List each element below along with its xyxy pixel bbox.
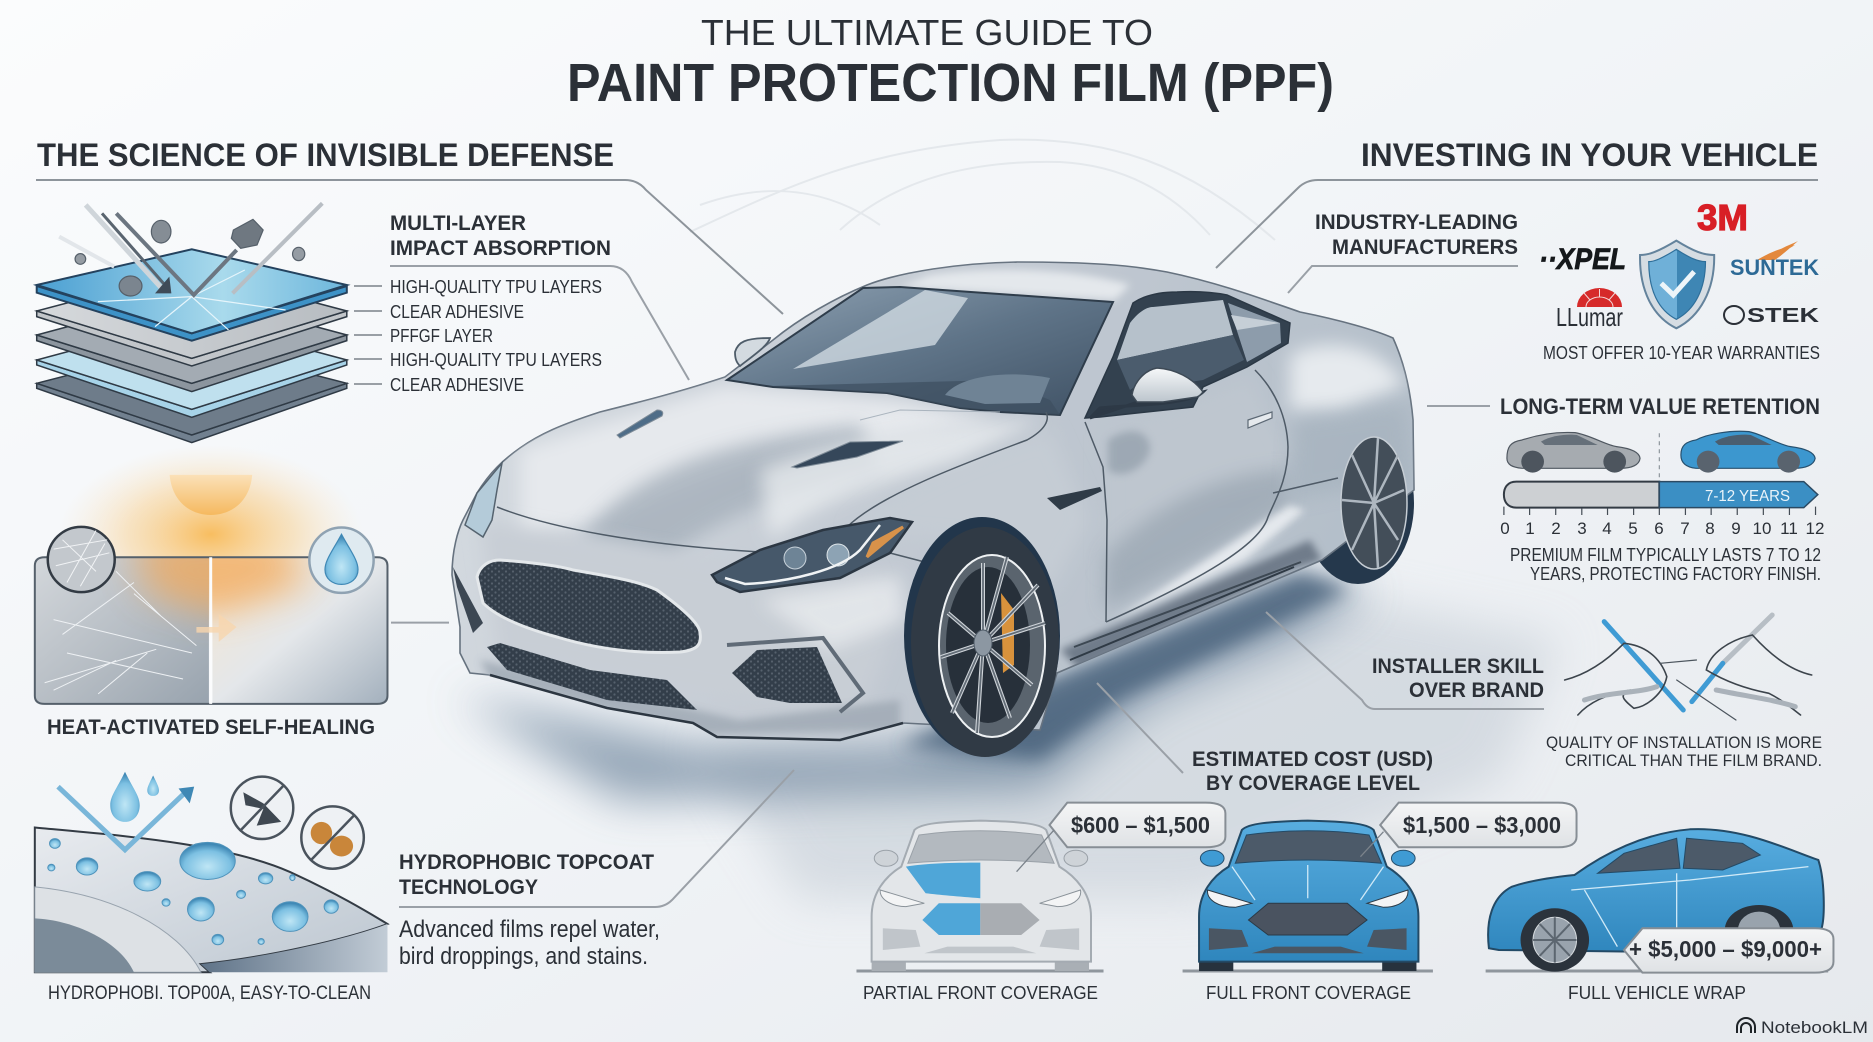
- hydrophobic text block: [399, 851, 660, 970]
- impact arrows: [59, 203, 322, 295]
- car body: [452, 262, 1414, 740]
- timeline numbers: 0: [1500, 519, 1510, 538]
- progress bar: elapsed: [1504, 482, 1659, 508]
- sun glow: [59, 445, 362, 623]
- lower panel: [201, 924, 387, 972]
- transition arrow: [196, 614, 237, 642]
- timeline numbers: 11: [1780, 519, 1798, 538]
- left section heading: [36, 137, 783, 314]
- timeline numbers: 3: [1577, 519, 1587, 538]
- rear wheel: [1341, 437, 1407, 569]
- coverage labels: FULL VEHICLE WRAP: [1568, 983, 1746, 1003]
- car: partial front coverage: [872, 821, 1091, 971]
- manufacturers heading: [1315, 211, 1518, 259]
- timeline numbers: 12: [1806, 519, 1824, 538]
- hydrophobic heading: HYDROPHOBIC TOPCOAT: [399, 851, 654, 874]
- hydrophobic description: Advanced films repel water,: [399, 916, 660, 943]
- value retention note: [1510, 545, 1821, 584]
- timeline numbers: 8: [1705, 519, 1715, 538]
- installer note: [1546, 733, 1822, 770]
- seat silhouette: [945, 374, 1050, 404]
- left headlight: [465, 463, 502, 537]
- sun: [170, 475, 252, 515]
- right mirror: [1090, 392, 1203, 418]
- multi-layer heading: MULTI-LAYER: [390, 212, 526, 235]
- timeline numbers: 7: [1680, 519, 1690, 538]
- left corner vent: [453, 567, 483, 633]
- main car illustration: [452, 262, 1414, 757]
- logo: STEK: [1724, 305, 1820, 327]
- fourth layer: [37, 318, 347, 417]
- crack lines: [98, 270, 286, 330]
- front wheel: [911, 527, 1059, 757]
- price tags text: $1,500 – $3,000: [1403, 812, 1561, 838]
- scratches: [45, 571, 196, 694]
- painted surface: [35, 827, 387, 972]
- price tags text: $600 – $1,500: [1071, 812, 1210, 838]
- wheel arch: [35, 887, 201, 972]
- side window glass: [1117, 300, 1233, 360]
- logo: LLumar: LLumar: [1556, 302, 1623, 332]
- layer label text: HIGH-QUALITY TPU LAYERS: [390, 350, 602, 370]
- logo: LLumar: [1556, 288, 1623, 332]
- cost heading: [1192, 748, 1433, 795]
- coverage cars: [856, 803, 1833, 973]
- heat overlay: [134, 534, 304, 616]
- main car shadow: [455, 572, 1560, 900]
- right headlight: [712, 518, 912, 592]
- third layer: [37, 293, 347, 392]
- value retention heading: LONG-TERM VALUE RETENTION: [1500, 394, 1820, 419]
- layer labels: HIGH-QUALITY TPU LAYERS: [390, 277, 602, 297]
- icon: no bird droppings: [231, 777, 293, 839]
- timeline numbers: 9: [1731, 519, 1741, 538]
- leader lines to car: [390, 266, 1544, 907]
- protected blue car: [1681, 431, 1815, 473]
- icon: installer hands: [1565, 615, 1812, 720]
- water drop magnifier: [309, 528, 374, 593]
- deflection arrow: [58, 787, 187, 850]
- manufacturers heading: MANUFACTURERS: [1332, 236, 1518, 259]
- scratched half: [35, 557, 209, 704]
- ticks: [1504, 507, 1816, 515]
- timeline numbers: 10: [1753, 519, 1771, 538]
- left section heading: THE SCIENCE OF INVISIBLE DEFENSE: [37, 137, 614, 173]
- cost heading: BY COVERAGE LEVEL: [1206, 772, 1420, 795]
- timeline numbers: 1: [1525, 519, 1535, 538]
- installer note: QUALITY OF INSTALLATION IS MORE: [1546, 733, 1822, 752]
- second layer: [37, 270, 347, 366]
- logo: SUNTEK: SUNTEK: [1730, 255, 1819, 280]
- title line 1: THE ULTIMATE GUIDE TO: [701, 12, 1153, 53]
- rear tyre: [1302, 422, 1414, 584]
- price tags text: [1071, 812, 1822, 962]
- hydrophobic text block: bird droppings, and stains.: [399, 943, 648, 970]
- windshield reflection: [793, 290, 968, 369]
- installer note: CRITICAL THAN THE FILM BRAND.: [1565, 751, 1822, 770]
- logo: XPEL: ··XPEL: [1539, 243, 1626, 276]
- windshield dash: [770, 380, 1060, 415]
- left mirror: [735, 338, 770, 366]
- coverage labels: [863, 983, 1746, 1003]
- car: full vehicle wrap: [1488, 829, 1824, 972]
- manufacturers heading: INDUSTRY-LEADING: [1315, 211, 1518, 234]
- healed half: [212, 557, 387, 704]
- logo: STEK: STEK: [1747, 305, 1820, 327]
- value retention illustration: [1504, 431, 1818, 515]
- layer callout ticks: [354, 286, 382, 384]
- timeline numbers: 6: [1654, 519, 1664, 538]
- layer label text: IMPACT ABSORPTION: [390, 237, 611, 260]
- lower grille: [487, 643, 697, 710]
- hydrophobic text block: TECHNOLOGY: [399, 876, 538, 899]
- body shading: [480, 270, 1413, 735]
- icon: no stains: [301, 806, 364, 869]
- timeline numbers: 2: [1551, 519, 1561, 538]
- door handles: [1047, 487, 1102, 510]
- coverage labels: FULL FRONT COVERAGE: [1206, 983, 1411, 1003]
- value retention note: YEARS, PROTECTING FACTORY FINISH.: [1530, 564, 1821, 584]
- hood vents: [792, 441, 903, 468]
- right section heading: [1216, 137, 1818, 268]
- progress bar: protected: [1659, 482, 1818, 508]
- price tag leaders: [1017, 830, 1384, 872]
- side window frame: [1085, 292, 1290, 418]
- timeline numbers: 4: [1602, 519, 1612, 538]
- panel lines: [490, 370, 1338, 740]
- title: [567, 12, 1334, 113]
- cost heading: ESTIMATED COST (USD): [1192, 748, 1433, 771]
- timeline divider: [1658, 433, 1660, 478]
- bottom layer: [37, 343, 347, 443]
- side window lower glass: [1117, 335, 1244, 390]
- side air intake: [732, 647, 842, 703]
- layer label text: [354, 212, 611, 395]
- price tag shapes: [1049, 803, 1833, 973]
- ghost car outline: [690, 140, 1275, 240]
- panel: heat-activated self-healing: [35, 445, 387, 704]
- NotebookLM badge: NotebookLM: [1761, 1018, 1868, 1037]
- rocks: [75, 219, 305, 296]
- water beads: [48, 839, 338, 945]
- value retention note: PREMIUM FILM TYPICALLY LASTS 7 TO 12: [1510, 545, 1821, 565]
- ground lines: [856, 969, 1828, 972]
- hydrophobic caption: HYDROPHOBI. TOP00A, EASY-TO-CLEAN: [48, 983, 371, 1004]
- panel border: [35, 557, 387, 704]
- coverage labels: PARTIAL FRONT COVERAGE: [863, 983, 1098, 1003]
- layer label text: PFFGF LAYER: [390, 326, 493, 346]
- installer heading: OVER BRAND: [1409, 679, 1544, 702]
- falling drops: [110, 772, 140, 822]
- car: full front coverage: [1199, 821, 1418, 971]
- icon: warranty shield: [1640, 241, 1714, 328]
- installer heading: [1372, 655, 1544, 702]
- scratch magnifier: [48, 527, 115, 592]
- price tags text: + $5,000 – $9,000+: [1629, 936, 1822, 962]
- top layer: [37, 249, 347, 341]
- bar label: 7-12 YEARS: [1705, 488, 1790, 505]
- quarter window: [1228, 303, 1281, 362]
- windshield: [727, 287, 1113, 415]
- layer label text: CLEAR ADHESIVE: [390, 375, 524, 395]
- timeline numbers: [1500, 519, 1824, 538]
- panel: hydrophobic topcoat: [35, 772, 387, 972]
- panel: multi-layer film stack: [37, 203, 347, 443]
- front wheel arch: [904, 517, 1060, 755]
- timeline numbers: 5: [1628, 519, 1638, 538]
- self-healing caption: HEAT-ACTIVATED SELF-HEALING: [47, 716, 375, 739]
- front grille: [477, 560, 700, 652]
- installer heading: INSTALLER SKILL: [1372, 655, 1544, 678]
- right section heading: INVESTING IN YOUR VEHICLE: [1361, 137, 1818, 173]
- manufacturer logos: [1539, 197, 1820, 332]
- logo: 3M: 3M: [1697, 197, 1748, 238]
- warranty note: MOST OFFER 10-YEAR WARRANTIES: [1543, 343, 1820, 363]
- layer label text: CLEAR ADHESIVE: [390, 302, 524, 322]
- unprotected grey car: [1507, 432, 1640, 473]
- logo: SUNTEK: [1730, 241, 1819, 280]
- title line 2: PAINT PROTECTION FILM (PPF): [567, 53, 1334, 113]
